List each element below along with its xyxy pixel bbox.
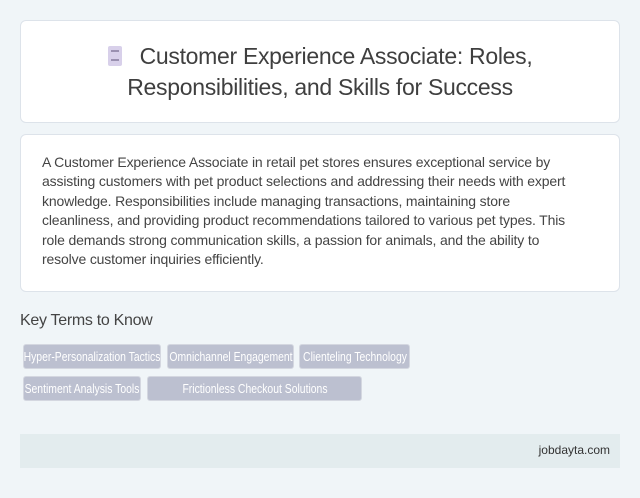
text block: description — [42, 154, 566, 267]
tag — [167, 344, 294, 369]
heading: title text: Customer Experience Associate: Roles, — [140, 43, 532, 69]
heading: title text: Responsibilities, and Skills for Success — [127, 74, 513, 100]
heading: title text — [108, 43, 532, 100]
tag: Omnichannel Engagement — [169, 349, 292, 364]
footer — [20, 434, 620, 468]
text block: description: resolve customer inquiries efficiently. — [42, 251, 264, 267]
text block: description: knowledge. Responsibilities include managing transactions, maintaining store — [42, 193, 510, 209]
heading: key terms: Key Terms to Know — [20, 312, 152, 329]
text block: description: A Customer Experience Associate in retail pet stores ensures exceptional service by — [42, 154, 550, 170]
tags: key terms — [23, 344, 410, 401]
text block: description: cleanliness, and providing product recommendations tailored to various pet types. This — [42, 212, 565, 228]
text block: description: role demands strong communication skills, a passion for animals, and the ability to — [42, 232, 539, 248]
tag — [23, 376, 141, 401]
tag: Sentiment Analysis Tools — [25, 381, 139, 396]
icon: document — [108, 46, 122, 66]
tag — [23, 344, 161, 369]
tag: Clienteling Technology — [303, 349, 406, 364]
tag: Frictionless Checkout Solutions — [182, 381, 327, 396]
text block: description: assisting customers with pet product selections and addressing their needs with expert — [42, 173, 565, 189]
tag — [147, 376, 362, 401]
tag: Hyper-Personalization Tactics — [24, 349, 160, 364]
panel: title — [20, 20, 620, 123]
tag — [299, 344, 410, 369]
footer: jobdayta.com — [539, 443, 610, 457]
panel: description — [20, 134, 620, 292]
